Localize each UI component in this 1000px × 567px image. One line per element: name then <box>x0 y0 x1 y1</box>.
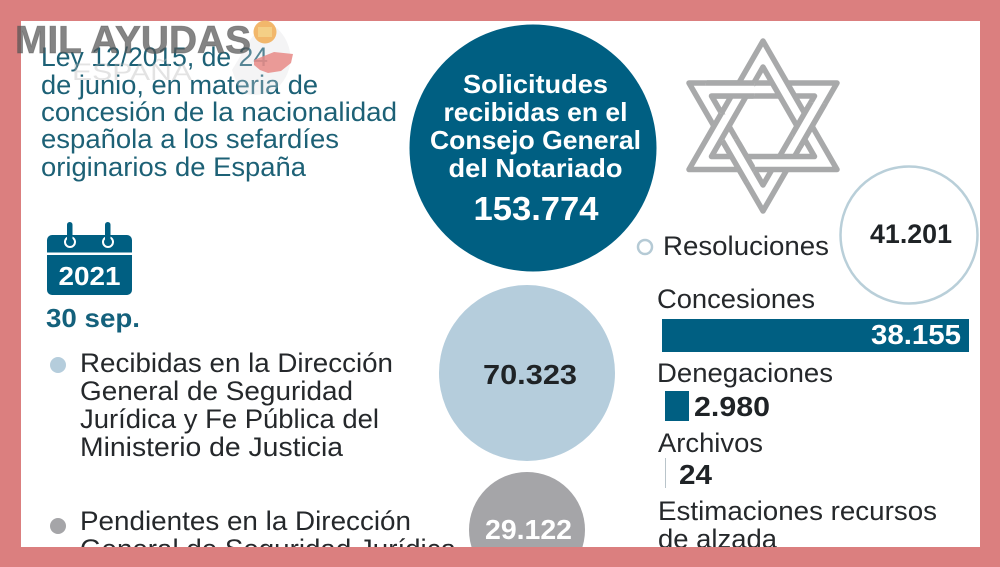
main circle: solicitudes recibidas: del Notariado <box>448 153 622 183</box>
icon: star of David <box>689 41 837 211</box>
bar: concesiones: 38.155 <box>871 319 961 350</box>
label: estimaciones recursos de alzada: Estimaciones recursos <box>658 496 937 526</box>
bar: denegaciones <box>657 358 833 422</box>
intro text: law reference <box>41 42 397 182</box>
icon: calendar 2021 <box>47 222 132 295</box>
bar: archivos <box>658 428 763 490</box>
bar: concesiones: Concesiones <box>657 284 815 314</box>
text: pendientes en la Dirección General: General de Seguridad Jurídica <box>80 534 456 564</box>
watermark: Mil Ayudas España <box>15 19 293 95</box>
date label: 30 sep. <box>46 303 140 333</box>
resoluciones legend: Resoluciones <box>663 231 829 261</box>
main circle: solicitudes recibidas: Solicitudes <box>463 69 608 99</box>
intro text: law reference: originarios de España <box>41 152 306 182</box>
text: pendientes en la Dirección General: Pendientes en la Dirección <box>80 506 411 536</box>
intro text: law reference: española a los sefardíes <box>41 124 339 154</box>
circle: 29.122 <box>469 472 585 567</box>
main circle: solicitudes recibidas: recibidas en el <box>444 97 628 127</box>
bullet: recibidas <box>50 357 66 373</box>
circle: 41.201: 41.201 <box>870 219 952 249</box>
intro text: law reference: Ley 12/2015, de 24 <box>41 42 268 72</box>
bar: archivos: Archivos <box>658 428 763 458</box>
bar: archivos: 24 <box>679 459 712 490</box>
text: recibidas en la Dirección General <box>80 348 393 462</box>
watermark: Mil Ayudas España: MIL AYUDAS <box>15 19 251 62</box>
text: recibidas en la Dirección General: General de Seguridad <box>80 376 353 406</box>
bar: denegaciones: Denegaciones <box>657 358 833 388</box>
circle: 70.323: 70.323 <box>483 359 577 390</box>
main circle: solicitudes recibidas: Consejo General <box>430 125 641 155</box>
main circle: solicitudes recibidas <box>410 24 656 272</box>
text: recibidas en la Dirección General: Recibidas en la Dirección <box>80 348 393 378</box>
bar: concesiones <box>657 284 969 352</box>
main circle: solicitudes recibidas: 153.774 <box>474 190 599 227</box>
intro text: law reference: concesión de la nacionalidad <box>41 97 397 127</box>
text: recibidas en la Dirección General: Jurídica y Fe Pública del <box>80 404 379 434</box>
circle: 41.201 <box>840 166 978 304</box>
bar: denegaciones: 2.980 <box>694 391 770 422</box>
text: recibidas en la Dirección General: Ministerio de Justicia <box>80 432 343 462</box>
intro text: law reference: de junio, en materia de <box>41 70 318 100</box>
icon: calendar 2021: 2021 <box>58 261 120 291</box>
bullet: pendientes <box>50 518 66 534</box>
circle: 29.122: 29.122 <box>485 514 572 545</box>
circle: 70.323 <box>439 285 615 461</box>
label: estimaciones recursos de alzada <box>658 496 937 554</box>
watermark: Mil Ayudas España: ESPAÑA <box>72 59 192 86</box>
text: pendientes en la Dirección General <box>80 506 456 564</box>
label: estimaciones recursos de alzada: de alzada <box>658 524 777 554</box>
